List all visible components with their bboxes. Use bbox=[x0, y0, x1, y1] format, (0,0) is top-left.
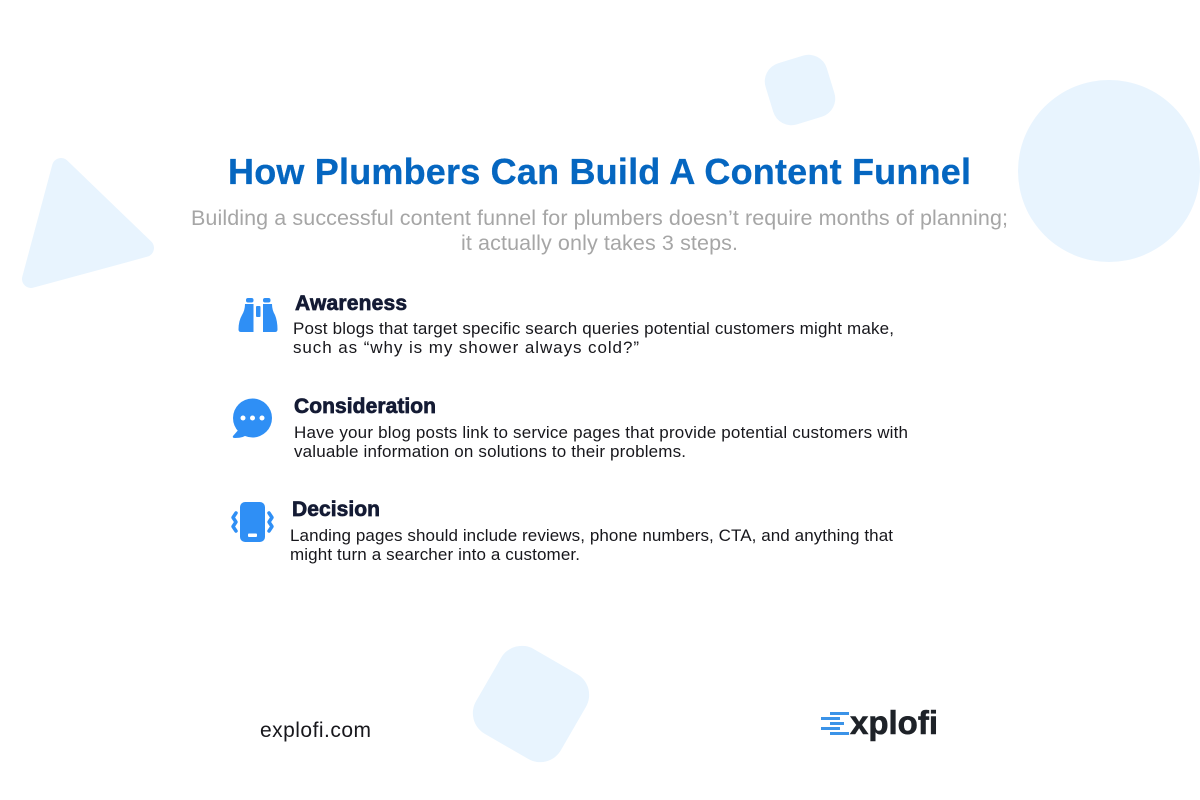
text: decision description: might turn a searcher into a customer. bbox=[290, 545, 580, 564]
heading: consideration: Consideration bbox=[294, 395, 436, 418]
icon: vibrating phone bbox=[233, 502, 272, 542]
icon: binoculars bbox=[238, 298, 278, 332]
text: awareness description: such as “why is my shower always cold?” bbox=[293, 338, 639, 357]
background shape: circle bbox=[1018, 80, 1200, 262]
heading: decision: Decision bbox=[292, 498, 380, 521]
background shape: large rounded square bbox=[464, 637, 598, 771]
text: decision description bbox=[290, 526, 893, 564]
title: How Plumbers Can Build A Content Funnel bbox=[228, 151, 971, 192]
text: consideration description bbox=[294, 423, 908, 461]
icon: speech bubble bbox=[233, 398, 272, 438]
text: decision description: Landing pages should include reviews, phone numbers, CTA, and anything that bbox=[290, 526, 893, 545]
text: consideration description: valuable information on solutions to their problems. bbox=[294, 442, 686, 461]
background shape: small rounded square bbox=[760, 50, 840, 130]
subtitle: it actually only takes 3 steps. bbox=[461, 231, 738, 255]
subtitle bbox=[191, 206, 1008, 255]
website url: explofi.com bbox=[260, 719, 371, 742]
logo wordmark: xplofi bbox=[850, 704, 938, 741]
heading: awareness: Awareness bbox=[295, 292, 407, 315]
step: awareness bbox=[238, 292, 894, 357]
step: decision bbox=[233, 498, 893, 564]
subtitle: Building a successful content funnel for plumbers doesn’t require months of planning; bbox=[191, 206, 1008, 230]
icon: logo bars bbox=[821, 712, 849, 735]
background shape: triangle bbox=[31, 167, 145, 279]
text: awareness description: Post blogs that target specific search queries potential customers might make, bbox=[293, 319, 894, 338]
step: consideration bbox=[233, 395, 908, 461]
text: awareness description bbox=[293, 319, 894, 357]
logo: explofi bbox=[821, 704, 938, 741]
text: consideration description: Have your blog posts link to service pages that provide potential customers with bbox=[294, 423, 908, 442]
